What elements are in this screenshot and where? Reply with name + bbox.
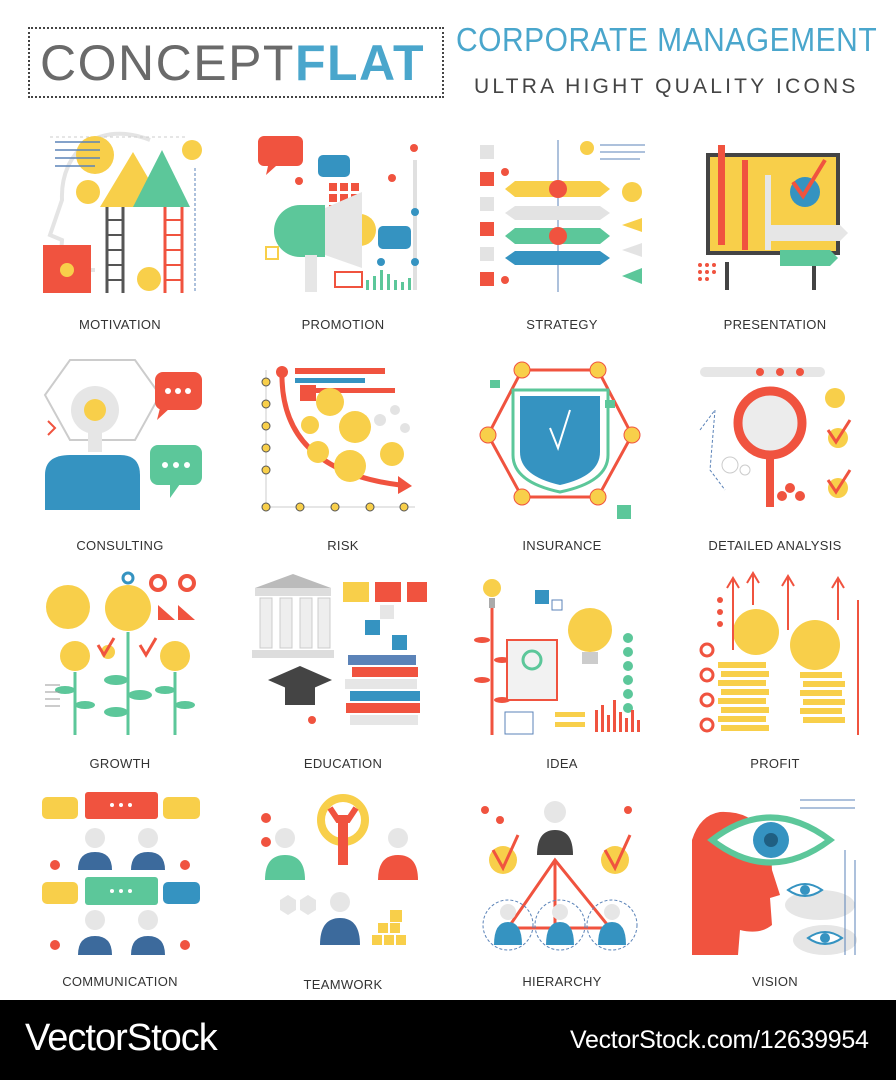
label: detailed analysis: DETAILED ANALYSIS bbox=[708, 538, 842, 553]
icon: idea bbox=[474, 579, 640, 735]
label: idea: IDEA bbox=[546, 756, 578, 771]
label: presentation: PRESENTATION bbox=[724, 317, 826, 332]
icon: teamwork bbox=[261, 798, 418, 945]
icon: presentation bbox=[698, 145, 848, 290]
footer: brand: VectorStock bbox=[25, 1017, 217, 1059]
footer: url: VectorStock.com/12639954 bbox=[570, 1026, 869, 1054]
label: motivation: MOTIVATION bbox=[79, 317, 161, 332]
icon: insurance bbox=[480, 362, 640, 519]
label: vision: VISION bbox=[752, 974, 798, 989]
icon: growth bbox=[45, 573, 195, 735]
icon: profit bbox=[701, 573, 858, 735]
icon: vision bbox=[692, 800, 857, 955]
label: growth: GROWTH bbox=[89, 756, 150, 771]
icon: promotion bbox=[258, 136, 419, 292]
icon: consulting bbox=[45, 360, 202, 510]
icon: motivation bbox=[43, 134, 202, 293]
header: subtitle: ULTRA HIGHT QUALITY ICONS bbox=[474, 75, 859, 98]
icon: communication bbox=[42, 792, 200, 955]
label: hierarchy: HIERARCHY bbox=[522, 974, 602, 989]
icon: risk bbox=[262, 366, 415, 511]
icon: education bbox=[252, 574, 427, 725]
icon: strategy bbox=[480, 140, 645, 292]
label: education: EDUCATION bbox=[304, 756, 382, 771]
label: strategy: STRATEGY bbox=[526, 317, 598, 332]
icon: hierarchy bbox=[481, 801, 637, 950]
label: consulting: CONSULTING bbox=[76, 538, 164, 553]
label: risk: RISK bbox=[327, 538, 359, 553]
label: insurance: INSURANCE bbox=[522, 538, 602, 553]
header: title: CORPORATE MANAGEMENT bbox=[456, 22, 877, 59]
icon: detailed analysis bbox=[700, 368, 850, 507]
label: profit: PROFIT bbox=[750, 756, 800, 771]
label: teamwork: TEAMWORK bbox=[304, 977, 382, 992]
label: promotion: PROMOTION bbox=[302, 317, 384, 332]
label: communication: COMMUNICATION bbox=[62, 974, 178, 989]
header: concept flat box: CONCEPTFLAT bbox=[40, 35, 425, 91]
footer band bbox=[0, 1000, 896, 1080]
